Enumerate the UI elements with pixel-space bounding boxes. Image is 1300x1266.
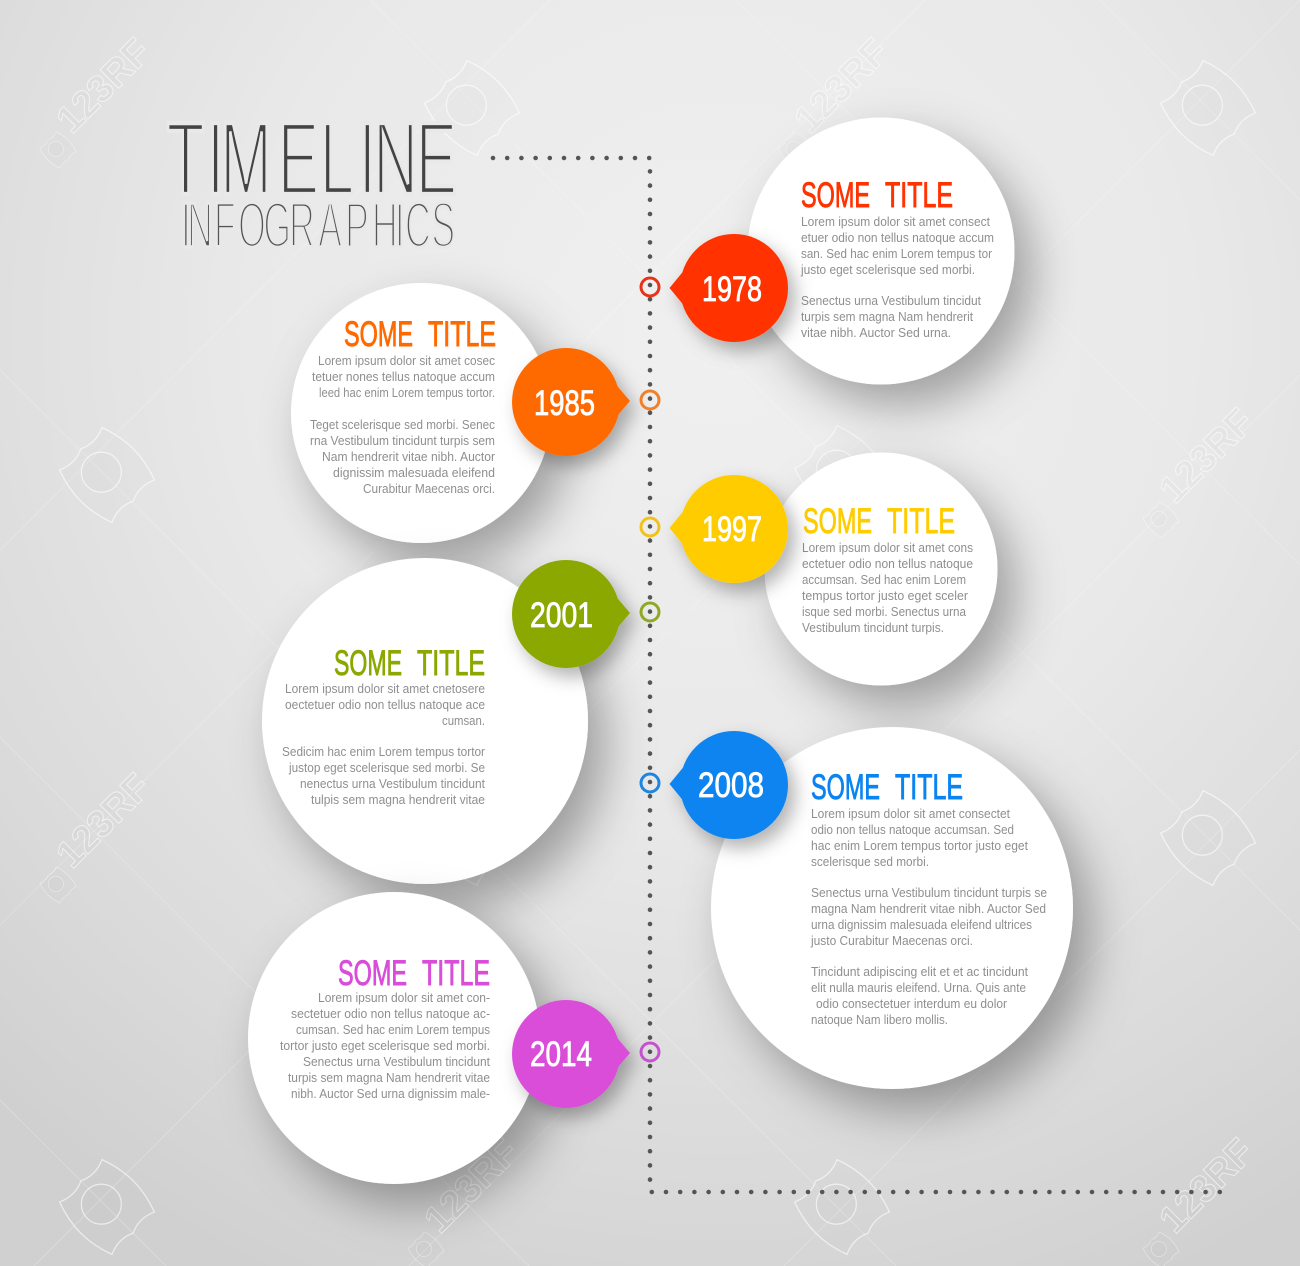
- timeline marker 1997: [641, 518, 659, 536]
- body text 1997: Lorem ipsum dolor sit amet cons: [802, 540, 973, 555]
- body text 1997: ectetuer odio non tellus natoque: [802, 556, 973, 571]
- subtitle line: INFOGRAPHICS: INFOGRAPHICS: [181, 189, 455, 261]
- heading 2014: SOME: [338, 954, 407, 993]
- body text 2008: elit nulla mauris eleifend. Urna. Quis ante: [811, 980, 1026, 995]
- body text 2014: cumsan. Sed hac enim Lorem tempus: [296, 1022, 490, 1037]
- event 1985: [291, 283, 659, 543]
- heading 2001: SOME: [334, 644, 402, 683]
- body text 1997: accumsan. Sed hac enim Lorem: [802, 572, 966, 587]
- watermarks: 123RF: [1152, 401, 1262, 511]
- heading 2014: [338, 954, 490, 993]
- body text 1978: vitae nibh. Auctor Sed urna.: [801, 325, 951, 340]
- heading 2008: TITLE: [895, 768, 963, 807]
- year bubble 2001: [512, 560, 630, 668]
- body text 2008: odio consectetuer interdum eu dolor: [816, 996, 1008, 1011]
- body text 2008: urna dignissim malesuada eleifend ultrices: [811, 917, 1032, 932]
- body text 1978: turpis sem magna Nam hendrerit: [801, 309, 973, 324]
- timeline marker 1985: [641, 391, 659, 409]
- heading 2008: [811, 768, 963, 807]
- body text 2001: tulpis sem magna hendrerit vitae: [311, 792, 485, 807]
- year bubble 1978: [670, 234, 788, 342]
- body text 2014: nibh. Auctor Sed urna dignissim male-: [291, 1086, 490, 1101]
- body text 2008: justo Curabitur Maecenas orci.: [810, 933, 973, 948]
- body text 1985: [310, 353, 496, 496]
- heading 1978: TITLE: [885, 176, 953, 215]
- body text 1997: isque sed morbi. Senectus urna: [802, 604, 967, 619]
- year bubble 1997: [670, 475, 788, 583]
- heading 2001: TITLE: [417, 644, 485, 683]
- heading 1997: TITLE: [887, 502, 955, 541]
- body text 2008: magna Nam hendrerit vitae nibh. Auctor Sed: [811, 901, 1046, 916]
- body text 2014: [280, 990, 490, 1101]
- panel circle 1985: [291, 283, 551, 543]
- body text 2001: Lorem ipsum dolor sit amet cnetosere: [285, 681, 485, 696]
- body text 2008: odio non tellus natoque accumsan. Sed: [811, 822, 1014, 837]
- body text 2001: oectetuer odio non tellus natoque ace: [285, 697, 485, 712]
- heading 1978: [801, 176, 953, 215]
- body text 1978: Lorem ipsum dolor sit amet consect: [801, 214, 990, 229]
- body text 2014: turpis sem magna Nam hendrerit vitae: [288, 1070, 490, 1085]
- panel circle 2001: [262, 558, 588, 884]
- body text 1978: [800, 214, 994, 340]
- timeline marker 1978: [641, 278, 659, 296]
- event 1997: [641, 452, 998, 686]
- body text 2001: [282, 681, 486, 807]
- event 2001: [262, 558, 659, 884]
- body text 2014: Lorem ipsum dolor sit amet con-: [318, 990, 490, 1005]
- body text 1985: Nam hendrerit vitae nibh. Auctor: [322, 449, 496, 464]
- year bubble 1978: 1978: [702, 270, 762, 309]
- watermarks: 123RF: [417, 1131, 527, 1241]
- timeline marker 2014: [641, 1043, 659, 1061]
- dotted timeline path: [493, 158, 1220, 1192]
- heading 1985: [344, 315, 496, 354]
- year bubble 1985: [512, 348, 630, 456]
- event 2014: [248, 892, 659, 1184]
- body text 1985: tetuer nones tellus natoque accum: [312, 369, 495, 384]
- heading 1978: SOME: [801, 176, 870, 215]
- watermarks: 123RF: [787, 31, 897, 141]
- body text 2008: scelerisque sed morbi.: [811, 854, 929, 869]
- body text 2008: natoque Nam libero mollis.: [811, 1012, 948, 1027]
- body text 2008: [810, 806, 1047, 1027]
- body text 2001: cumsan.: [442, 713, 485, 728]
- body text 1985: Curabitur Maecenas orci.: [363, 481, 495, 496]
- body text 2014: Senectus urna Vestibulum tincidunt: [303, 1054, 490, 1069]
- watermarks: 123RF: [787, 766, 897, 876]
- watermarks: 123RF: [49, 766, 159, 876]
- body text 2008: hac enim Lorem tempus tortor justo eget: [811, 838, 1028, 853]
- body text 1997: Vestibulum tincidunt turpis.: [802, 620, 944, 635]
- heading 2001: [334, 644, 485, 683]
- body text 2008: Senectus urna Vestibulum tincidunt turpis se: [811, 885, 1047, 900]
- body text 1985: Teget scelerisque sed morbi. Senec: [310, 417, 495, 432]
- timeline marker 2008: [641, 774, 659, 792]
- body text 1978: Senectus urna Vestibulum tincidut: [801, 293, 981, 308]
- year bubble 1985: 1985: [534, 384, 595, 423]
- event 1978: [641, 118, 1014, 384]
- body text 2014: sectetuer odio non tellus natoque ac-: [291, 1006, 490, 1021]
- year bubble 2001: 2001: [530, 596, 593, 635]
- panel circle 1978: [748, 118, 1014, 384]
- body text 1985: dignissim malesuada eleifend: [333, 465, 495, 480]
- panel circle 2014: [248, 892, 540, 1184]
- year bubble 2014: 2014: [530, 1035, 592, 1074]
- body text 1997: tempus tortor justo eget sceler: [802, 588, 969, 603]
- heading 1997: SOME: [803, 502, 872, 541]
- year bubble 2008: 2008: [698, 766, 764, 805]
- body text 2001: Sedicim hac enim Lorem tempus tortor: [282, 744, 486, 759]
- body text 1985: rna Vestibulum tincidunt turpis sem: [310, 433, 495, 448]
- heading 1985: SOME: [344, 315, 413, 354]
- title line: TIMELINE: TIMELINE: [167, 101, 457, 216]
- watermarks: 123RF: [1152, 1131, 1262, 1241]
- heading 1985: TITLE: [428, 315, 496, 354]
- panel circle 1997: [764, 452, 998, 686]
- watermarks: 123RF: [417, 401, 527, 511]
- body text 2008: Tincidunt adipiscing elit et et ac tincidunt: [811, 964, 1028, 979]
- body text 1997: [802, 540, 973, 635]
- panel circle 2008: [711, 727, 1073, 1089]
- body text 1985: leed hac enim Lorem tempus tortor.: [319, 385, 495, 400]
- body text 2001: justop eget scelerisque sed morbi. Se: [288, 760, 485, 775]
- heading 2014: TITLE: [422, 954, 490, 993]
- body text 2014: tortor justo eget scelerisque sed morbi.: [280, 1038, 490, 1053]
- body text 1978: justo eget scelerisque sed morbi.: [800, 262, 975, 277]
- body text 2008: Lorem ipsum dolor sit amet consectet: [811, 806, 1010, 821]
- year bubble 2014: [512, 1000, 630, 1108]
- year bubble 1997: 1997: [702, 510, 762, 549]
- body text 2001: nenectus urna Vestibulum tincidunt: [300, 776, 485, 791]
- timeline marker 2001: [641, 603, 659, 621]
- heading 1997: [803, 502, 955, 541]
- year bubble 2008: [670, 731, 788, 839]
- body text 1978: san. Sed hac enim Lorem tempus tor: [801, 246, 993, 261]
- event 2008: [641, 727, 1073, 1089]
- title: [167, 101, 457, 261]
- watermarks: 123RF: [49, 31, 159, 141]
- body text 1978: etuer odio non tellus natoque accum: [801, 230, 994, 245]
- body text 1985: Lorem ipsum dolor sit amet cosec: [318, 353, 495, 368]
- heading 2008: SOME: [811, 768, 880, 807]
